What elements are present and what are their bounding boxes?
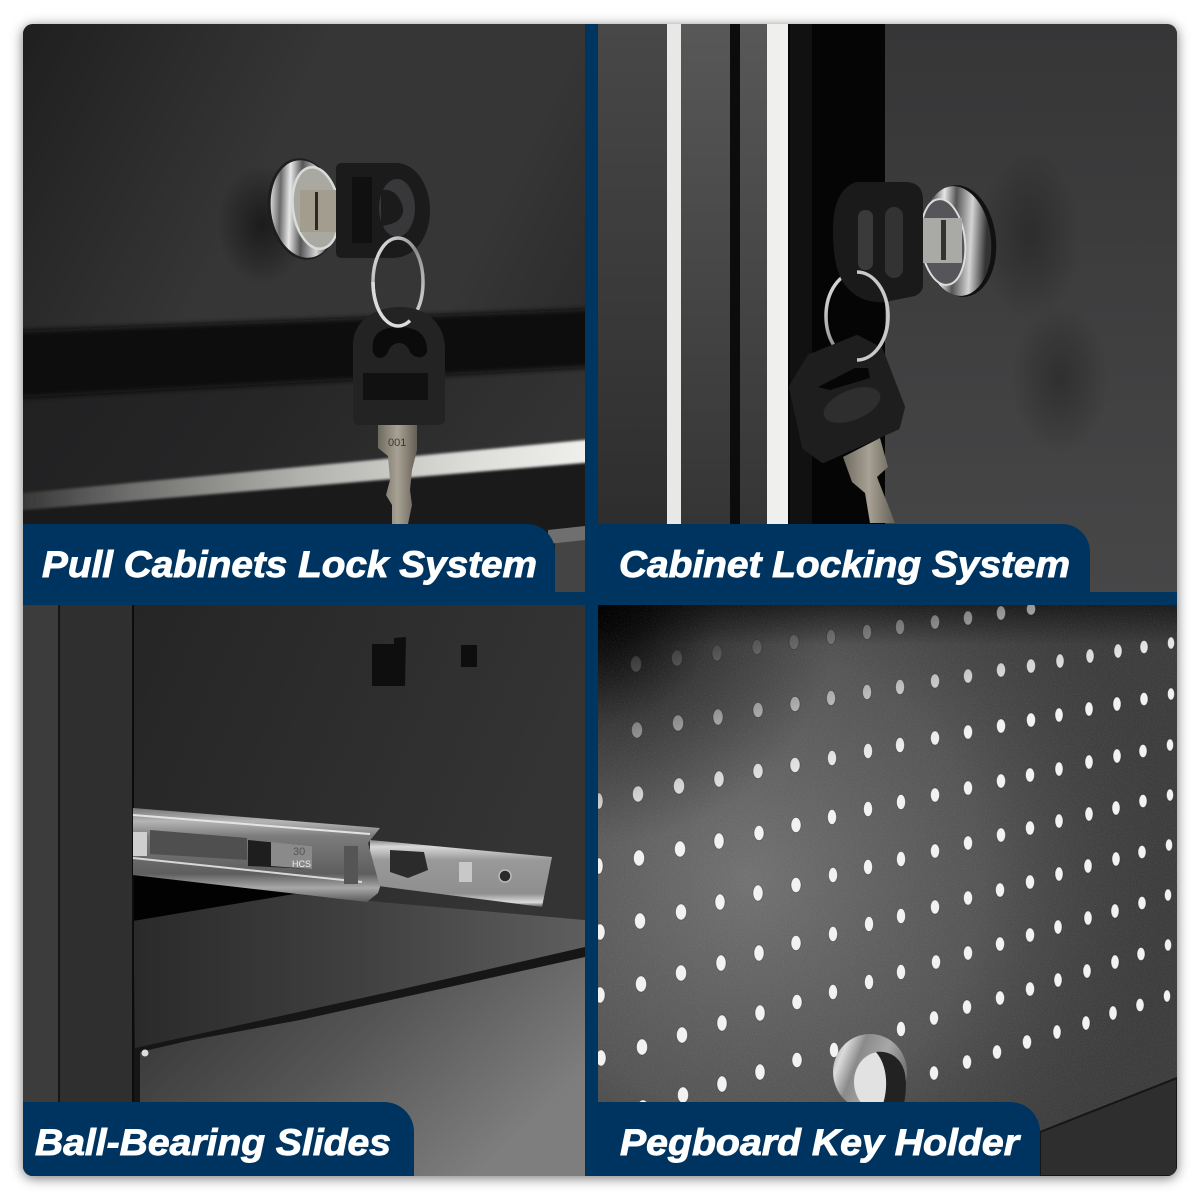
icon: chrome cam lock bbox=[268, 158, 336, 260]
label text: Cabinet Locking System bbox=[619, 544, 1070, 585]
icon: ball-bearing slide rail bbox=[133, 808, 552, 907]
icon: key holder grommet bbox=[833, 1034, 907, 1112]
pegboard holes bbox=[595, 603, 1174, 1112]
icon: ball-bearing slide rail: HCS bbox=[292, 859, 311, 869]
icon: key ring bbox=[373, 238, 423, 326]
door shadows bbox=[1005, 193, 1088, 422]
icon: lower key with fob bbox=[353, 307, 445, 524]
icon: key ring bbox=[824, 276, 890, 347]
icon: chrome cam lock bbox=[923, 185, 996, 297]
icon: upper key fob bbox=[833, 182, 923, 302]
lock shadow bbox=[230, 182, 288, 268]
back wall of cabinet bbox=[133, 605, 585, 920]
label text: Pegboard Key Holder bbox=[620, 1122, 1022, 1163]
cabinet frame columns bbox=[598, 24, 885, 524]
shadow under slide bbox=[133, 875, 300, 921]
drawer gap shadow band bbox=[13, 309, 595, 398]
cabinet side frame bbox=[23, 605, 148, 1176]
drawer handle highlight strip bbox=[13, 439, 595, 511]
icon: key ring front arc bbox=[373, 282, 410, 326]
panel: ball-bearing slides bbox=[23, 605, 585, 1176]
panel: pull cabinets lock system bbox=[13, 24, 595, 600]
label text: Pull Cabinets Lock System bbox=[42, 544, 537, 585]
drawer front bbox=[140, 949, 585, 1176]
icon: lower key with fob bbox=[792, 338, 902, 523]
pegboard speckle bbox=[598, 605, 1177, 1176]
icon: ball-bearing slide rail: 30 bbox=[293, 846, 305, 858]
label: pull cabinets lock system bbox=[23, 524, 555, 592]
square mounting slots bbox=[372, 637, 477, 686]
panel: pegboard key holder bbox=[595, 603, 1177, 1176]
label: cabinet locking system bbox=[598, 524, 1090, 592]
icon: upper key fob bbox=[336, 163, 430, 258]
lower drawer face bbox=[23, 380, 388, 493]
drawer gap shadow bbox=[190, 947, 585, 1040]
label: pegboard key holder bbox=[598, 1102, 1040, 1176]
lower drawer dark strip bbox=[23, 463, 585, 548]
panel: cabinet locking system bbox=[598, 24, 1177, 592]
cabinet interior wedge bbox=[133, 880, 585, 1048]
icon: key ring front arc bbox=[857, 272, 888, 360]
right-hand drawer remnant bbox=[548, 526, 585, 592]
icon: lower key with fob: 001 bbox=[388, 437, 406, 449]
label text: Ball-Bearing Slides bbox=[35, 1122, 391, 1163]
base ledge at bottom right bbox=[1040, 1078, 1177, 1176]
label: ball-bearing slides bbox=[23, 1102, 414, 1176]
